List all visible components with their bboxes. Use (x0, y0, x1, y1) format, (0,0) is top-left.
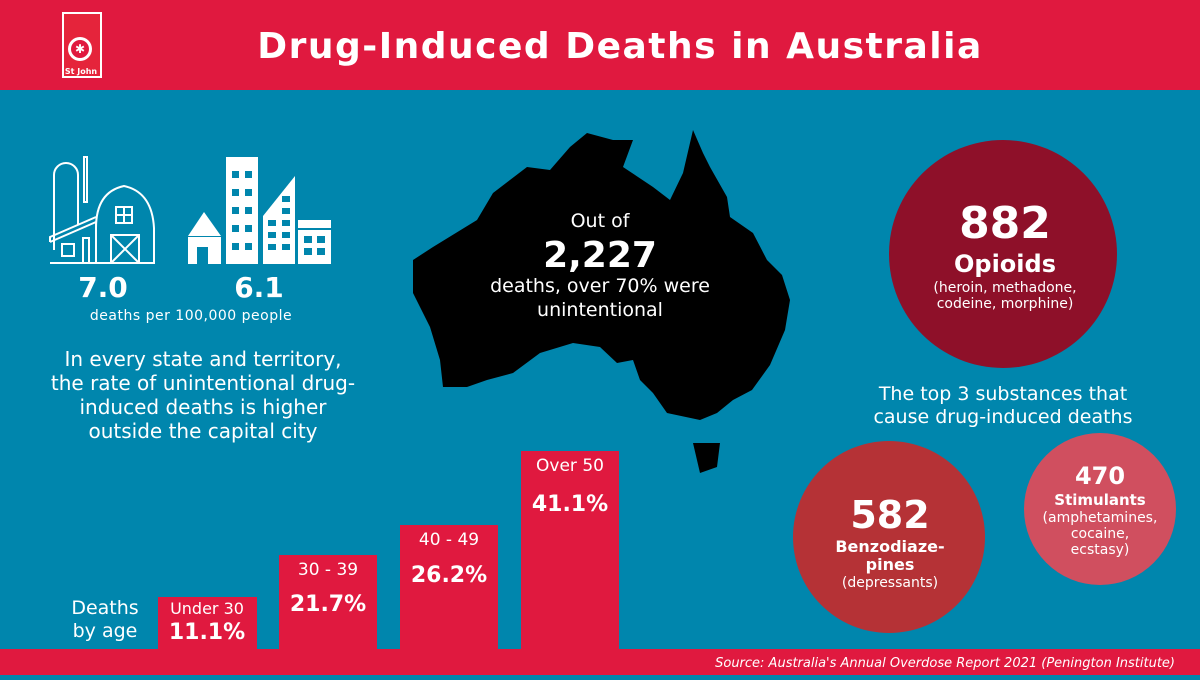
text block: state rates: In every state and territory, (64, 347, 342, 371)
circle: opioids: Opioids (954, 250, 1056, 278)
circle: opioids (889, 140, 1117, 368)
text block: state rates: induced deaths is higher (80, 395, 327, 419)
text block: state rates: the rate of unintentional drug- (51, 371, 355, 395)
label: deaths by age: Deaths (71, 597, 139, 619)
stat: city 6.1: 6.1 (234, 271, 284, 304)
bar chart: deaths by age (158, 451, 619, 652)
bar chart: deaths by age: Over 50 (536, 456, 604, 476)
bar chart: deaths by age: 11.1% (169, 620, 245, 645)
map: Australia (413, 130, 790, 473)
logo: St John: St John (65, 67, 97, 76)
title: Drug-Induced Deaths in Australia (257, 26, 983, 67)
label: deaths by age: by age (73, 620, 137, 642)
label: deaths by age (71, 597, 139, 642)
bar chart: deaths by age: 21.7% (290, 592, 366, 617)
icon: city buildings (188, 157, 331, 264)
text block: state rates: outside the capital city (88, 419, 318, 443)
circle: benzodiazepines (793, 441, 985, 633)
bar chart: deaths by age: Under 30 (170, 599, 244, 618)
bar chart: deaths by age: 41.1% (532, 492, 608, 517)
circle: benzodiazepines: 582 (850, 493, 930, 537)
circle: stimulants: (amphetamines, (1043, 510, 1157, 526)
text: out of 2,227 deaths: Out of (571, 210, 631, 232)
circle: stimulants: 470 (1075, 462, 1125, 490)
circle: stimulants: cocaine, (1071, 526, 1129, 542)
circle: opioids: 882 (959, 198, 1051, 249)
text: out of 2,227 deaths: unintentional (537, 299, 663, 321)
text: top 3 substances: cause drug-induced deaths (873, 406, 1133, 428)
text: top 3 substances: The top 3 substances that (878, 383, 1127, 405)
bar chart: deaths by age: 40 - 49 (419, 530, 479, 550)
icon: rural barn (50, 157, 154, 263)
circle: opioids: (heroin, methadone, (933, 280, 1077, 296)
text block: state rates (51, 347, 355, 443)
text: top 3 substances (873, 383, 1133, 428)
footer bar with source: Source: Australia's Annual Overdose Report 2021 (Penington Institute) (715, 656, 1175, 671)
text: out of 2,227 deaths: 2,227 (543, 235, 657, 276)
stat: rural 7.0: 7.0 (78, 271, 128, 304)
circle: benzodiazepines: (depressants) (842, 575, 938, 591)
circle: stimulants: Stimulants (1054, 491, 1146, 509)
bar chart: deaths by age: 26.2% (411, 563, 487, 588)
circle: benzodiazepines: pines (866, 555, 914, 574)
circle: opioids: codeine, morphine) (937, 296, 1073, 312)
header bar (0, 0, 1200, 90)
circle: stimulants (1024, 433, 1176, 585)
circle: stimulants: ecstasy) (1071, 542, 1129, 558)
bar chart: deaths by age: 30 - 39 (298, 560, 358, 580)
text: out of 2,227 deaths: deaths, over 70% were (490, 275, 710, 297)
text: out of 2,227 deaths (490, 210, 710, 321)
logo: St John: ✱ (75, 42, 85, 56)
logo: St John (62, 12, 102, 78)
caption: deaths per 100,000: deaths per 100,000 people (90, 308, 292, 324)
footer bar with source (0, 649, 1200, 675)
circle: benzodiazepines: Benzodiaze- (835, 537, 945, 556)
